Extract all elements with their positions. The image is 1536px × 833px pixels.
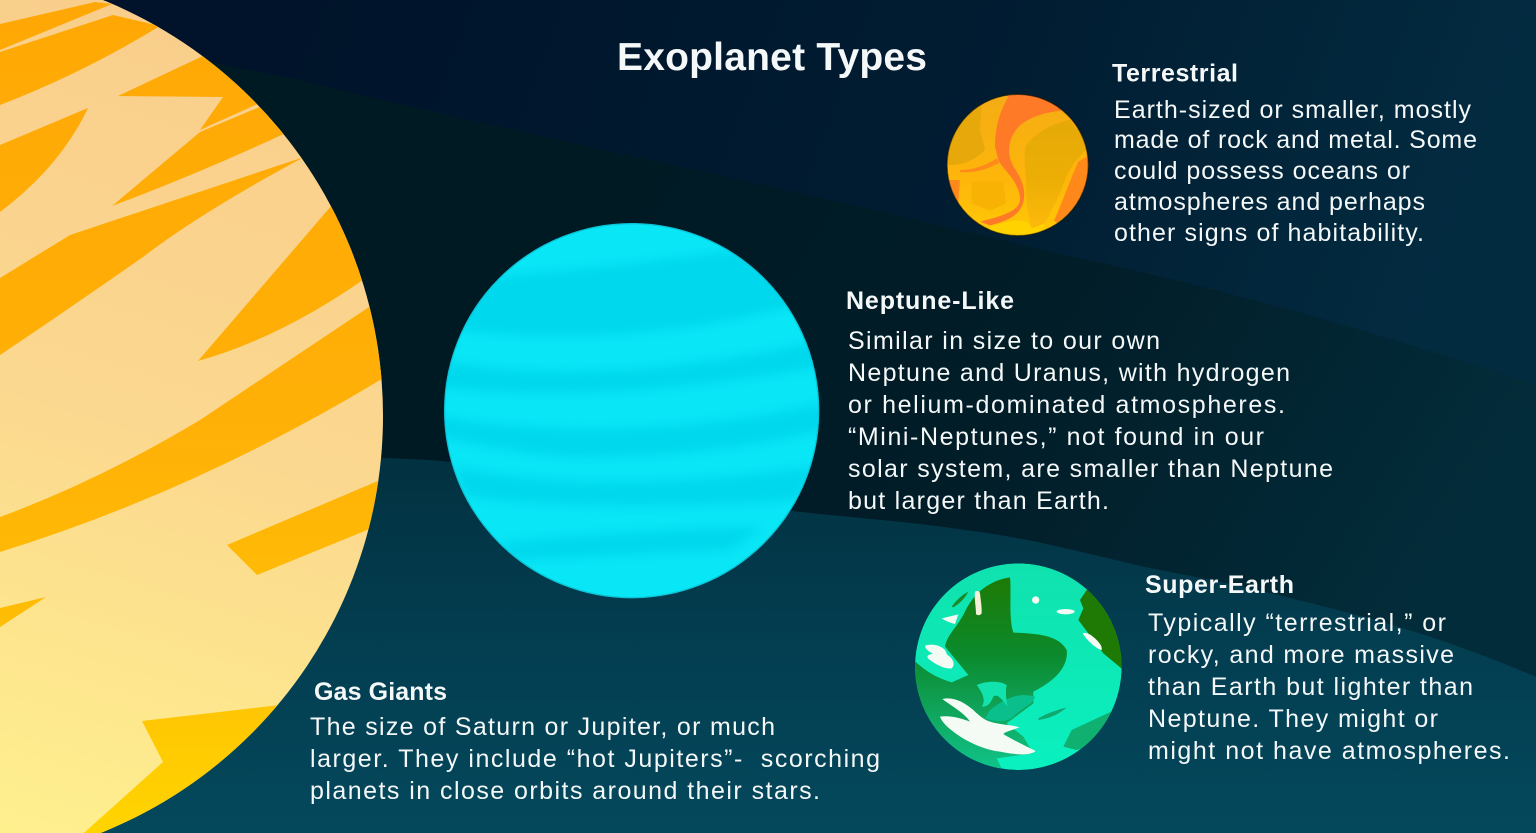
text: neptune-like: but larger than Earth.	[848, 487, 1109, 515]
text: terrestrial: Earth-sized or smaller, mostly	[1114, 96, 1472, 124]
terrestrial planet	[943, 94, 1090, 240]
text: super-earth: than Earth but lighter than	[1148, 673, 1473, 701]
text: gas giants: larger. They include “hot Jupiters”- scorching	[310, 745, 880, 773]
neptune-like planet	[437, 223, 823, 598]
gas giant planet	[0, 0, 390, 833]
text: neptune-like: Neptune-Like	[846, 287, 1014, 315]
text: neptune-like: Neptune and Uranus, with hydrogen	[848, 359, 1290, 387]
text: super-earth: Super-Earth	[1145, 571, 1294, 599]
text: super-earth: Neptune. They might or	[1148, 705, 1438, 733]
text: gas giants	[310, 678, 880, 805]
title: Exoplanet Types	[617, 36, 927, 79]
text: neptune-like: solar system, are smaller than Neptune	[848, 455, 1333, 483]
text: super-earth	[1145, 571, 1510, 765]
text: super-earth: rocky, and more massive	[1148, 641, 1454, 669]
text: terrestrial: could possess oceans or	[1114, 157, 1410, 185]
text: gas giants: The size of Saturn or Jupiter, or much	[310, 713, 775, 741]
text: terrestrial: other signs of habitability.	[1114, 219, 1424, 247]
text: neptune-like	[846, 287, 1333, 515]
super-earth planet	[915, 563, 1122, 770]
text: terrestrial: atmospheres and perhaps	[1114, 188, 1425, 216]
text: super-earth: might not have atmospheres.	[1148, 737, 1510, 765]
text: gas giants: planets in close orbits around their stars.	[310, 777, 820, 805]
text: gas giants: Gas Giants	[314, 678, 447, 706]
text: neptune-like: Similar in size to our own	[848, 327, 1160, 355]
text: neptune-like: “Mini-Neptunes,” not found in our	[848, 423, 1264, 451]
text: terrestrial: Terrestrial	[1112, 60, 1238, 88]
text: terrestrial	[1112, 60, 1477, 247]
text: super-earth: Typically “terrestrial,” or	[1148, 609, 1446, 637]
text: terrestrial: made of rock and metal. Some	[1114, 126, 1477, 154]
text: neptune-like: or helium-dominated atmospheres.	[848, 391, 1285, 419]
